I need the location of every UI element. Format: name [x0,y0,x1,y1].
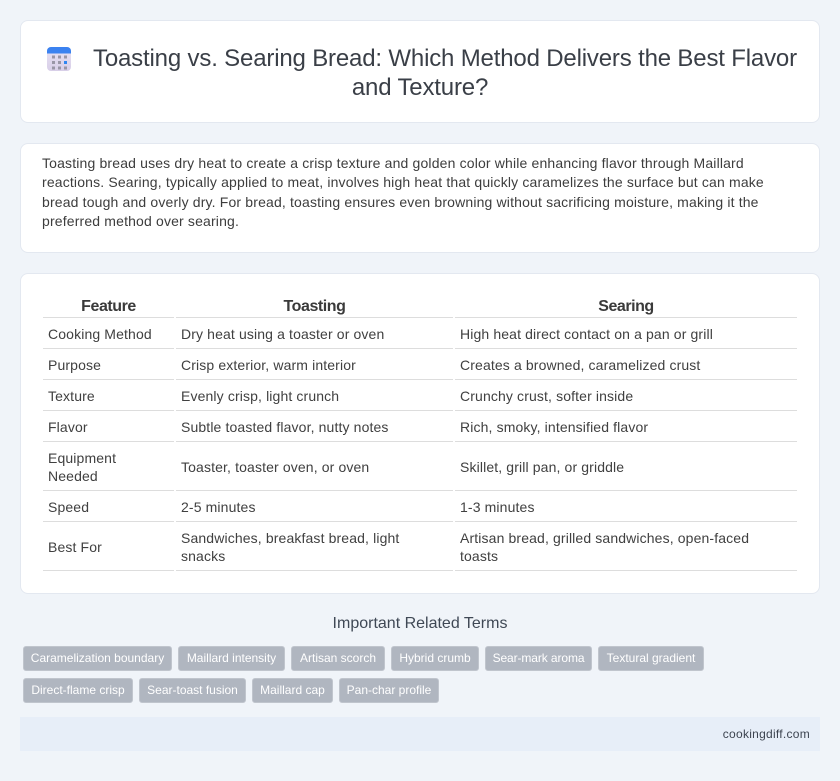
row: texture: Crunchy crust, softer inside [460,388,633,404]
panel: comparison table [20,273,820,594]
row: texture [48,388,633,404]
table header row [81,298,654,315]
footer source: cookingdiff.com [723,727,810,741]
intro paragraph [42,154,764,229]
tag [291,646,385,671]
row: equipment needed: Toaster, toaster oven, or oven [181,459,369,475]
row: equipment needed: Equipment [48,450,116,466]
tag: Artisan scorch [300,651,376,665]
tag: Hybrid crumb [399,651,471,665]
row: best for: toasts [460,548,498,564]
row: texture: Texture [48,388,95,404]
intro paragraph: reactions. Searing, typically applied to meat, involves high heat that quickly caramelizes the surface but can make [42,174,764,190]
tag [23,678,133,703]
table header row: Toasting [284,298,345,315]
row: purpose [48,357,700,373]
row: speed: 2-5 minutes [181,499,256,515]
intro paragraph: Toasting bread uses dry heat to create a crisp texture and golden color while enhancing flavor through Maillard [42,154,744,170]
tag: Sear-toast fusion [147,683,238,697]
tag: Direct-flame crisp [31,683,125,697]
comparison table [43,298,797,571]
row: speed: Speed [48,499,89,515]
tag [485,646,592,671]
row: cooking method [48,326,713,342]
row: flavor: Rich, smoky, intensified flavor [460,419,648,435]
tag [252,678,333,703]
tag list [23,646,704,703]
tag: Caramelization boundary [31,651,164,665]
footer bar [20,717,820,751]
row: speed: 1-3 minutes [460,499,535,515]
row: best for [48,530,749,564]
tag: Maillard cap [260,683,325,697]
intro paragraph: bread tough and overly dry. For bread, toasting ensures even browning without sacrificing moisture, making it the [42,194,759,210]
row: equipment needed: Needed [48,468,98,484]
row: cooking method: Cooking Method [48,326,152,342]
row: flavor [48,419,648,435]
panel: title card [20,20,820,123]
row: purpose: Creates a browned, caramelized crust [460,357,700,373]
table header row: Feature [81,298,136,315]
title [93,45,797,101]
intro paragraph: preferred method over searing. [42,213,239,229]
row: speed [48,499,535,515]
tag [391,646,479,671]
row: cooking method: High heat direct contact on a pan or grill [460,326,713,342]
row: best for: Sandwiches, breakfast bread, light [181,530,399,546]
heading: related terms: Important Related Terms [333,615,507,632]
row: equipment needed [48,450,624,484]
tag: Pan-char profile [347,683,431,697]
tag: Textural gradient [607,651,695,665]
tag [598,646,704,671]
tag [339,678,439,703]
tag [139,678,246,703]
icon: calendar grid [47,47,71,71]
row: best for: Artisan bread, grilled sandwiches, open-faced [460,530,749,546]
row: purpose: Crisp exterior, warm interior [181,357,356,373]
row: texture: Evenly crisp, light crunch [181,388,339,404]
row: equipment needed: Skillet, grill pan, or griddle [460,459,624,475]
table header row: Searing [598,298,654,315]
row: flavor: Subtle toasted flavor, nutty notes [181,419,389,435]
row: best for: snacks [181,548,225,564]
title: and Texture? [352,74,488,101]
tag [23,646,172,671]
tag: Maillard intensity [187,651,276,665]
panel: intro text [20,143,820,253]
row: purpose: Purpose [48,357,101,373]
row: flavor: Flavor [48,419,88,435]
title: Toasting vs. Searing Bread: Which Method Delivers the Best Flavor [93,45,797,72]
row: cooking method: Dry heat using a toaster or oven [181,326,384,342]
tag [178,646,285,671]
tag: Sear-mark aroma [493,651,584,665]
row: best for: Best For [48,539,102,555]
